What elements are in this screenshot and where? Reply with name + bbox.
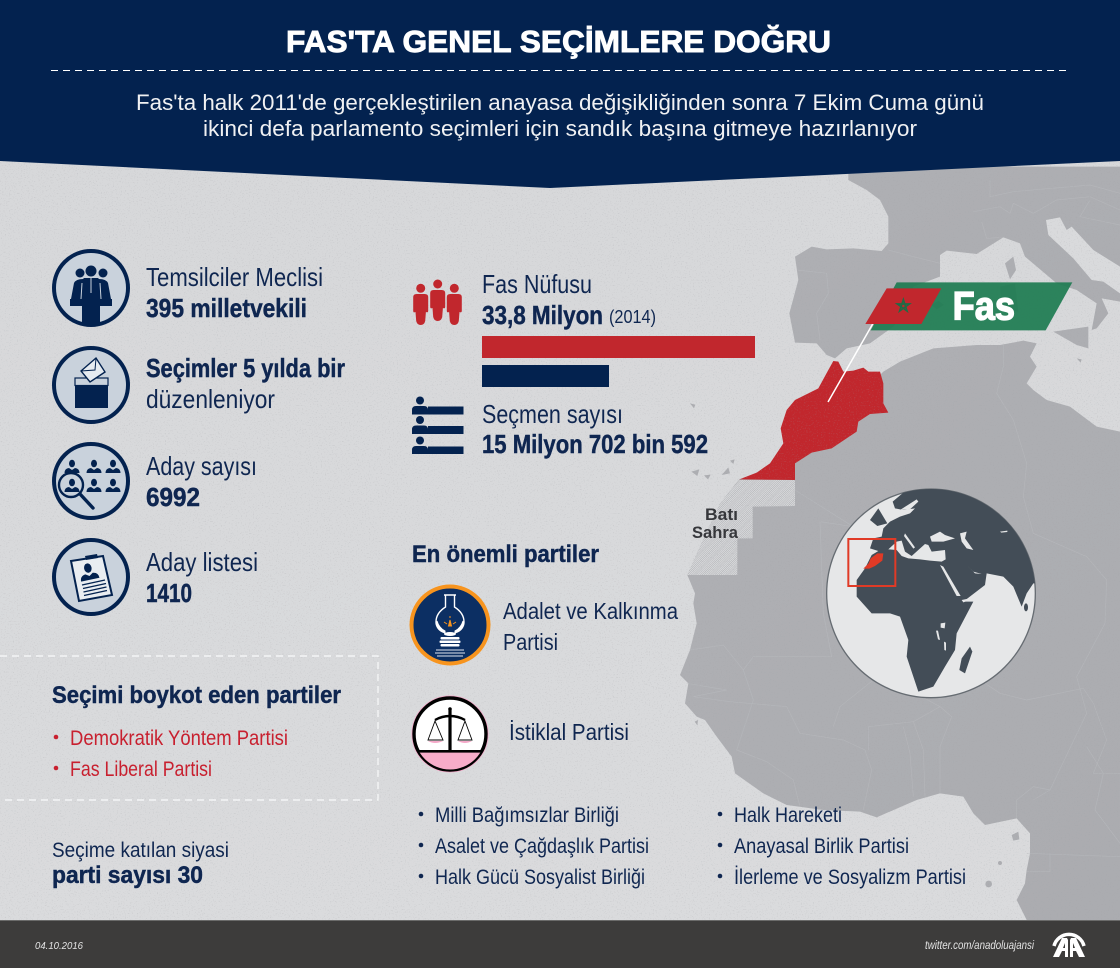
text: population: 33,8 Milyon bbox=[482, 300, 603, 330]
Western Sahara hatched region bbox=[687, 480, 795, 575]
logo: lamp bbox=[412, 586, 488, 664]
land: Europe bbox=[789, 167, 1120, 358]
text: İstiklal Partisi: İstiklal Partisi bbox=[509, 719, 629, 745]
locator box bbox=[848, 539, 895, 586]
green banner bbox=[871, 282, 1072, 330]
title: FAS'TA GENEL SEÇİMLERE DOĞRU bbox=[286, 24, 831, 59]
subtitle bbox=[136, 90, 984, 141]
header ribbon bbox=[0, 0, 1120, 188]
subtitle: ikinci defa parlamento seçimleri için sandık başına gitmeye hazırlanıyor bbox=[203, 116, 917, 141]
Britain and Ireland bbox=[870, 508, 887, 526]
boycott party list: Demokratik Yöntem Partisi bbox=[70, 727, 288, 750]
text: Seçimler 5 yılda bir bbox=[146, 353, 345, 414]
text: population bbox=[482, 269, 656, 330]
text: Aday listesi: Aday listesi bbox=[146, 547, 258, 577]
list: other parties left: Asalet ve Çağdaşlık Partisi bbox=[435, 835, 649, 858]
text: Adalet ve Kalkınma Partisi bbox=[503, 598, 678, 655]
flag star bbox=[897, 300, 909, 311]
panel: population and voters bbox=[412, 269, 755, 459]
icon: candidates with magnifier bbox=[54, 444, 128, 518]
logo: scales bbox=[410, 696, 490, 772]
text: Aday sayısı: Aday sayısı bbox=[146, 451, 257, 481]
text: Temsilciler Meclisi: Temsilciler Meclisi bbox=[146, 262, 323, 292]
land: Africa bbox=[680, 341, 1120, 920]
text: Aday sayısı bbox=[146, 451, 257, 512]
Morocco on globe bbox=[863, 553, 883, 569]
icon: candidate list clipboard bbox=[54, 540, 128, 614]
icon: parliament podium bbox=[54, 251, 128, 326]
flag bbox=[865, 288, 941, 324]
footer bar bbox=[0, 920, 1120, 968]
text: voters bbox=[482, 399, 708, 459]
boycott party list: Fas Liberal Partisi bbox=[70, 758, 212, 781]
country borders bbox=[687, 180, 1120, 872]
inland seas bbox=[888, 499, 1007, 651]
text: Aday sayısı: 6992 bbox=[146, 482, 200, 512]
text: Adalet ve Kalkınma Partisi: Adalet ve Kalkınma bbox=[503, 598, 678, 624]
list: other parties right bbox=[718, 804, 966, 889]
list: other parties left: Halk Gücü Sosyalist Birliği bbox=[435, 866, 645, 889]
map: North Africa and Southern Europe bbox=[680, 167, 1120, 920]
text: voters: 15 Milyon 702 bin 592 bbox=[482, 429, 708, 459]
callout: Fas flag banner bbox=[828, 282, 1072, 402]
panel: boycotting parties bbox=[0, 656, 378, 800]
label: Batı Sahra bbox=[692, 505, 739, 542]
country name: Fas bbox=[953, 284, 1015, 328]
list: other parties left bbox=[419, 804, 649, 889]
text: Seçimler 5 yılda bir: Seçimler 5 yılda bir bbox=[146, 353, 345, 383]
list: other parties left: Milli Bağımsızlar Birliği bbox=[435, 804, 619, 827]
icon: voters bbox=[412, 396, 464, 454]
text: Temsilciler Meclisi bbox=[146, 262, 323, 323]
text: number of parties: parti sayısı 30 bbox=[52, 862, 203, 889]
Morocco highlighted bbox=[739, 361, 888, 480]
sea: Adriatic bbox=[1046, 217, 1120, 293]
heading: main parties: En önemli partiler bbox=[412, 541, 599, 568]
text: number of parties: Seçime katılan siyasi bbox=[52, 839, 229, 862]
text: Temsilciler Meclisi: 395 milletvekili bbox=[146, 293, 307, 323]
text: Seçimler 5 yılda bir: düzenleniyor bbox=[146, 384, 275, 414]
boycott heading: Seçimi boykot eden partiler bbox=[52, 682, 341, 709]
list: other parties right: Anayasal Birlik Partisi bbox=[734, 835, 909, 858]
date: 04.10.2016 bbox=[35, 940, 83, 952]
text: voters: Seçmen sayısı bbox=[482, 399, 623, 429]
label: Batı Sahra: Batı bbox=[705, 505, 738, 524]
text: Aday listesi: 1410 bbox=[146, 578, 192, 608]
label: Batı Sahra: Sahra bbox=[692, 523, 739, 542]
text: Aday listesi bbox=[146, 547, 258, 608]
text: population: (2014) bbox=[609, 307, 656, 327]
twitter handle: twitter.com/anadoluajansi bbox=[925, 940, 1034, 952]
locator globe bbox=[827, 483, 1050, 698]
Madagascar bbox=[959, 647, 972, 673]
speckle texture bbox=[0, 150, 1120, 920]
panel: main parties bbox=[410, 541, 966, 889]
text: Adalet ve Kalkınma Partisi: Partisi bbox=[503, 629, 558, 655]
text: population: Fas Nüfusu bbox=[482, 269, 592, 299]
icon: population bbox=[413, 280, 462, 325]
islands bbox=[690, 257, 1088, 887]
subtitle: Fas'ta halk 2011'de gerçekleştirilen anayasa değişikliğinden sonra 7 Ekim Cuma günü bbox=[136, 90, 984, 115]
boycott party list bbox=[54, 727, 288, 781]
icon: Anadolu Agency logo bbox=[1053, 934, 1085, 957]
Sri Lanka bbox=[1024, 603, 1028, 611]
leader line bbox=[828, 324, 873, 402]
bar: voters bbox=[482, 365, 609, 387]
icon: ballot box bbox=[54, 348, 128, 422]
panel: key facts column bbox=[54, 251, 345, 614]
list: other parties right: İlerleme ve Sosyalizm Partisi bbox=[734, 866, 966, 889]
text: number of parties bbox=[52, 839, 229, 889]
bar: population bbox=[482, 336, 755, 358]
Eurasia and Africa bbox=[856, 489, 1035, 692]
list: other parties right: Halk Hareketi bbox=[734, 804, 842, 827]
